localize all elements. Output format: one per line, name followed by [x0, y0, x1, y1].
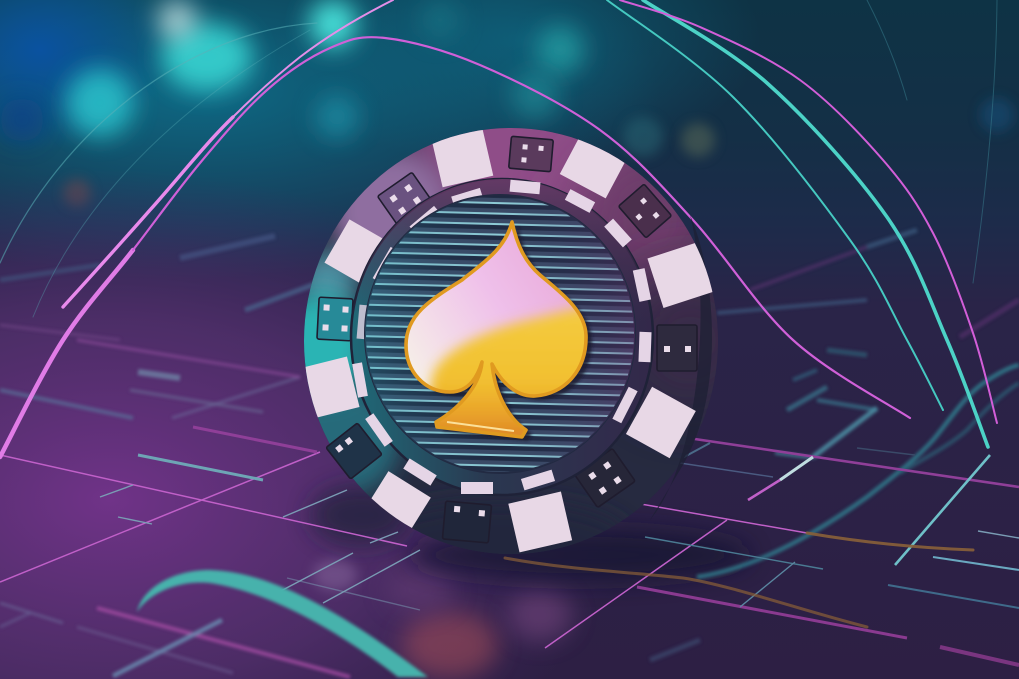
teal floor swoosh	[137, 570, 428, 677]
chip center disc	[365, 195, 635, 473]
chip dice squares	[317, 136, 697, 543]
trail: faint right line	[867, 0, 907, 100]
chip body	[304, 128, 718, 554]
trail: pink outer arc	[620, 0, 997, 423]
grid lines: violet	[0, 427, 1019, 665]
orange floor streak	[505, 533, 973, 627]
spade pink body	[406, 222, 586, 437]
grid lines: teal	[100, 443, 1019, 610]
chip white edge spots	[295, 129, 719, 552]
spade icon	[406, 222, 600, 445]
chip side thickness	[650, 215, 712, 520]
trail: thin teal arc	[607, 0, 943, 410]
trail: thick teal arc	[643, 0, 988, 447]
trail: faint second left arc	[33, 30, 310, 317]
light trails	[0, 0, 997, 457]
spade gold outline	[406, 222, 586, 437]
chip inner ring dashes	[352, 180, 652, 494]
blurred grid streaks	[0, 230, 1019, 677]
bokeh lights	[0, 0, 1019, 300]
trail: faint teal left arc	[0, 23, 317, 263]
trail: pink upper arc	[63, 0, 393, 307]
trail: magenta lower arc	[0, 37, 910, 457]
trail: faint far right line	[973, 0, 997, 283]
spade shadow	[412, 226, 592, 441]
chip inner ring	[351, 179, 653, 495]
floor glow	[0, 170, 750, 679]
poker chip	[304, 128, 718, 554]
spade gold lower area	[422, 300, 584, 436]
spade base highlight	[447, 422, 514, 431]
